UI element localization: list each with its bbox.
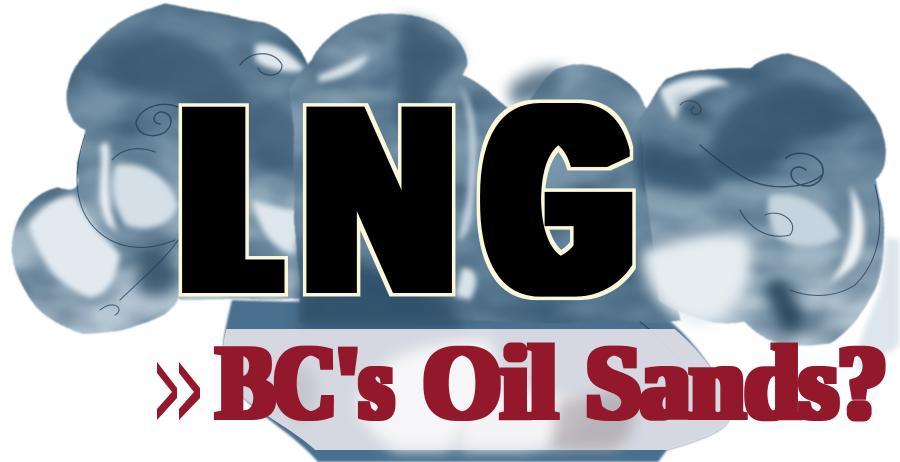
smoke: right highlights [640,233,751,325]
smoke: centre plumes [290,15,680,322]
smoke: left plume [12,4,320,336]
subtitle [217,324,887,441]
smoke: right pale lobe [857,237,900,372]
subtitle: Oil [423,324,557,441]
smoke: left lobe and highlights [28,44,305,298]
smoke: centre shadows [300,18,720,330]
smoke: right fine highlights [660,77,864,285]
smoke: left dark mass [109,35,305,296]
translucent banner over the bowl [215,329,735,450]
icon: double chevron [157,362,200,420]
title: LNG [199,51,625,348]
letter N: N [305,52,454,348]
letter G: G [491,53,625,348]
subtitle: BC's [217,324,393,441]
smoke: bottom bowl [223,300,730,462]
smoke: right plume [640,53,888,345]
letter L: L [199,51,264,347]
smoke: centre highlights [318,55,476,300]
smoke: right dark mass [640,82,846,330]
smoke: curling wisps [77,54,880,400]
